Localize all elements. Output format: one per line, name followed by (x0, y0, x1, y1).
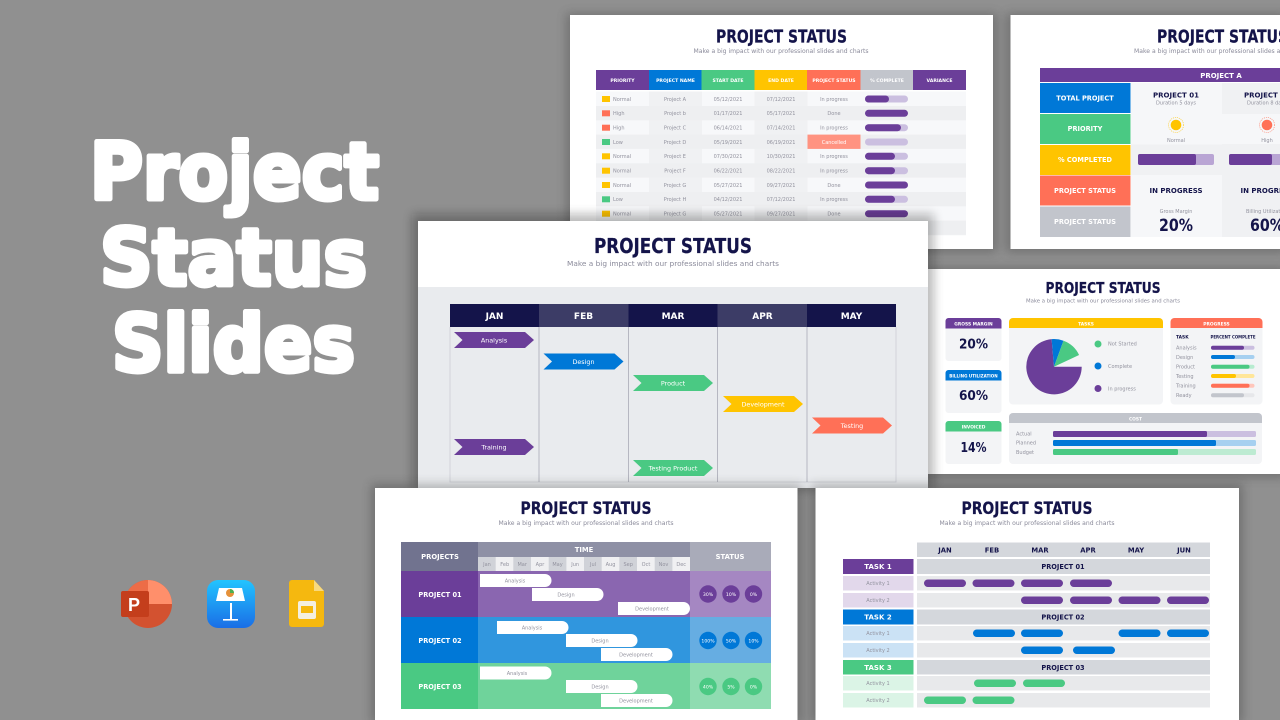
subtitle: dashboard slide: Make a big impact with our professional slides and charts (1026, 298, 1180, 304)
table rows: Project G (664, 212, 686, 218)
heading: gantt slide: PROJECT STATUS (962, 499, 1092, 519)
table rows: Normal (613, 183, 631, 189)
progress bars (865, 96, 908, 217)
card: gross margin: GROSS MARGIN (954, 322, 993, 328)
row: project 02: 50% (726, 638, 737, 644)
table rows: 05/17/2021 (767, 111, 795, 117)
table rows: Normal (613, 97, 631, 103)
group: task 1 (843, 559, 1210, 608)
panel: progress bars: PROGRESS (1203, 322, 1230, 328)
card: billing utilization (946, 370, 1002, 413)
table rows: Project C (664, 126, 687, 132)
panel: cost bars: Actual (1016, 432, 1032, 438)
subtitle: table slide: Make a big impact with our professional slides and charts (694, 48, 868, 55)
table rows: Normal (613, 168, 631, 174)
panel: tasks pie chart: TASKS (1078, 322, 1094, 328)
table rows: In progress (820, 168, 848, 174)
table rows: In progress (820, 126, 848, 132)
table rows: Normal (613, 212, 631, 218)
title: Slides (112, 300, 355, 390)
panel: progress bars: Training (1175, 384, 1196, 390)
panel: progress bars: Testing (1175, 374, 1194, 380)
row labels: PROJECT STATUS (1054, 187, 1116, 195)
table rows: 09/27/2021 (767, 212, 795, 218)
month header: MAR (1031, 546, 1049, 554)
panel: tasks pie chart (1009, 318, 1163, 404)
row: project 02: PROJECT 02 (418, 637, 462, 645)
month cells: Mar (517, 562, 528, 568)
heading: time slide: PROJECT STATUS (520, 499, 652, 519)
arrow: product: Product (661, 380, 686, 388)
row: project 03: Design (591, 684, 609, 690)
panel: task gantt slide (811, 484, 1243, 720)
table rows: Project A (664, 97, 687, 103)
panel: monthly arrows slide (412, 214, 934, 490)
row labels: TOTAL PROJECT (1056, 94, 1114, 102)
column: project 01: Duration 5 days (1156, 100, 1196, 106)
panel: progress bars (1170, 318, 1262, 404)
table rows: Done (827, 212, 841, 218)
table header: % COMPLETE (870, 78, 904, 84)
subtitle: arrows slide: Make a big impact with our professional slides and charts (567, 259, 779, 268)
panel: cost bars (1009, 413, 1262, 464)
group: task 3: TASK 3 (864, 664, 892, 672)
heading: dashboard slide: PROJECT STATUS (1046, 279, 1160, 297)
title: Status (100, 214, 367, 304)
table rows: Done (827, 183, 841, 189)
month header: FEB (574, 312, 593, 322)
project A header: PROJECT A (1200, 72, 1242, 80)
table header: END DATE (768, 78, 794, 84)
row labels: % COMPLETED (1058, 156, 1112, 164)
column: project 01 (1131, 83, 1222, 237)
month header: MAY (841, 312, 863, 322)
arrow: analysis (454, 332, 534, 348)
arrow: development (723, 396, 803, 412)
table rows: 06/19/2021 (767, 140, 795, 146)
table header (401, 542, 771, 571)
row: project 02: 10% (748, 638, 759, 644)
column: project 01: Normal (1167, 138, 1185, 144)
column: project 01: 20% (1159, 216, 1193, 235)
month header (450, 304, 896, 327)
table rows: Low (613, 197, 623, 203)
table rows: Project b (664, 111, 686, 117)
panel: progress bars: Analysis (1176, 346, 1197, 352)
arrow: product (633, 375, 713, 391)
column: project 01: Gross Margin (1160, 209, 1192, 215)
table header (596, 70, 966, 90)
arrow: testing product: Testing Product (648, 464, 698, 472)
row labels: PRIORITY (1068, 125, 1103, 133)
card: invoiced (946, 421, 1002, 464)
table rows: 10/30/2021 (767, 154, 795, 160)
column: project 01: IN PROGRESS (1149, 187, 1203, 195)
icon: Keynote (207, 580, 255, 628)
month header: FEB (985, 546, 999, 554)
table rows: In progress (820, 197, 848, 203)
month cells: Dec (676, 562, 686, 568)
table rows: Cancelled (822, 140, 846, 146)
heading: arrows slide: PROJECT STATUS (594, 234, 752, 258)
month cells (478, 557, 690, 571)
panel: progress bars: Product (1176, 364, 1195, 370)
row: project 01: Analysis (505, 578, 526, 584)
group: task 1: Activity 2 (866, 598, 890, 604)
card: invoiced: 14% (960, 440, 987, 456)
month header (917, 542, 1210, 557)
row: project 03: Analysis (507, 671, 528, 677)
row: project 01: Design (557, 592, 575, 598)
group: task 1: Activity 1 (866, 581, 890, 587)
table rows: Project E (664, 154, 686, 160)
card: billing utilization: 60% (959, 388, 988, 404)
panel: status table slide (566, 13, 997, 253)
month cells: Feb (500, 562, 509, 568)
table header: PROJECT STATUS (812, 78, 856, 84)
table header: START DATE (712, 78, 744, 84)
panel: projects time status slide (371, 484, 802, 720)
month header: JUN (1176, 546, 1191, 554)
row: project 02: Analysis (522, 626, 543, 632)
card: gross margin: 20% (959, 336, 988, 352)
row: project 02: 100% (701, 638, 715, 644)
row: project 03: 0% (750, 684, 758, 690)
panel: progress bars: TASK (1176, 334, 1189, 340)
month header: MAY (1128, 546, 1144, 554)
row: project 03: PROJECT 03 (418, 683, 462, 691)
group: task 3: Activity 1 (866, 681, 890, 687)
panel: progress bars: PERCENT COMPLETE (1210, 334, 1256, 340)
month cells: Sep (623, 562, 633, 568)
column: project 02 (1222, 83, 1280, 237)
card: billing utilization: BILLING UTILIZATION (949, 374, 998, 378)
month cells: May (552, 562, 563, 568)
table rows: Normal (613, 154, 631, 160)
month cells: Apr (536, 562, 545, 568)
table rows: 06/14/2021 (714, 126, 742, 132)
group: task 3: PROJECT 03 (1041, 664, 1085, 672)
group: task 1: PROJECT 01 (1041, 563, 1085, 571)
table rows: 05/19/2021 (714, 140, 742, 146)
group: task 2: PROJECT 02 (1041, 614, 1085, 622)
subtitle: time slide: Make a big impact with our professional slides and charts (498, 520, 674, 527)
table rows: 07/12/2021 (767, 97, 795, 103)
table rows: Project H (664, 197, 686, 203)
month header: JAN (937, 546, 952, 554)
table rows (596, 92, 966, 236)
row: project 01: 10% (726, 592, 737, 598)
month header: APR (1080, 546, 1096, 554)
table rows: High (613, 111, 624, 117)
table header: TIME (575, 546, 594, 554)
panel: cost bars: Planned (1016, 440, 1036, 446)
arrow: analysis: Analysis (481, 336, 508, 344)
column: project 01: PROJECT 01 (1153, 92, 1199, 100)
row: project 03 (401, 663, 771, 709)
arrow: design (544, 354, 624, 370)
row: project 01: 0% (750, 592, 758, 598)
table rows: 05/12/2021 (714, 97, 742, 103)
month header: MAR (662, 312, 684, 322)
panel: project A comparison slide (1006, 13, 1280, 253)
row: project 02: Development (619, 652, 653, 658)
card: invoiced: INVOICED (962, 424, 986, 430)
month header: APR (752, 312, 773, 322)
table rows: In progress (820, 154, 848, 160)
panel: progress bars: Ready (1176, 393, 1192, 399)
card: gross margin (946, 318, 1002, 361)
table rows: High (613, 126, 624, 132)
table rows: 07/14/2021 (767, 126, 795, 132)
month cells: Jun (570, 562, 579, 568)
month cells: Oct (642, 562, 650, 568)
arrow: development: Development (741, 400, 785, 408)
panel: tasks pie chart: Not Started (1108, 342, 1137, 348)
table rows: 06/22/2021 (714, 168, 742, 174)
group: task 3: Activity 2 (866, 698, 890, 704)
table rows: 08/22/2021 (767, 168, 795, 174)
project A header (1040, 68, 1280, 82)
table header: STATUS (716, 553, 744, 561)
table rows: 09/27/2021 (767, 183, 795, 189)
icon: PowerPoint (121, 580, 172, 628)
panel: dashboard slide (925, 267, 1280, 478)
title (90, 128, 379, 390)
table rows: 07/12/2021 (767, 197, 795, 203)
arrow: training: Training (480, 444, 507, 452)
panel: cost bars: Budget (1016, 450, 1034, 456)
column: project 02: High (1261, 138, 1273, 144)
table rows: 04/12/2021 (714, 197, 742, 203)
arrow: testing (812, 418, 892, 434)
table rows: 07/30/2021 (714, 154, 742, 160)
table rows: Low (613, 140, 623, 146)
icon: PowerPoint: P (128, 595, 140, 615)
table rows: In progress (820, 97, 848, 103)
row: project 01: PROJECT 01 (418, 591, 462, 599)
table header: PRIORITY (610, 78, 635, 84)
row: project 02: Design (591, 638, 609, 644)
row: project 03: 40% (703, 684, 714, 690)
row labels (1040, 83, 1130, 237)
heading: table slide: PROJECT STATUS (716, 28, 847, 48)
month header: JAN (485, 312, 503, 322)
panel: progress bars: Design (1176, 355, 1193, 361)
panel: tasks pie chart: Complete (1108, 364, 1132, 370)
arrow: testing: Testing (840, 422, 863, 430)
row: project 01: Development (635, 606, 669, 612)
month cells: Aug (606, 562, 615, 568)
panel: cost bars: COST (1129, 416, 1142, 422)
table rows: Done (827, 111, 841, 117)
timeline grid (450, 327, 896, 482)
table header: VARIANCE (927, 78, 952, 84)
subtitle: gantt slide: Make a big impact with our professional slides and charts (940, 520, 1114, 527)
arrow: design: Design (572, 358, 595, 366)
table rows: Project G (664, 183, 686, 189)
table rows: Project D (664, 140, 686, 146)
icon: Google Slides (289, 580, 324, 627)
panel: tasks pie chart: In progress (1108, 386, 1136, 392)
group: task 1: TASK 1 (864, 563, 892, 571)
group: task 2: TASK 2 (864, 614, 892, 622)
group: task 2: Activity 2 (866, 648, 890, 654)
table header: PROJECT NAME (656, 78, 695, 84)
title: Project (90, 128, 379, 218)
row: project 03: Development (619, 698, 653, 704)
arrow: testing product (633, 460, 713, 476)
row labels: PROJECT STATUS (1054, 218, 1116, 226)
group: task 2 (843, 610, 1210, 658)
month cells: Jan (482, 562, 491, 568)
row: project 01: 30% (703, 592, 714, 598)
row: project 02 (401, 617, 771, 663)
table rows: 05/27/2021 (714, 183, 742, 189)
month cells: Jul (589, 562, 596, 568)
table header: PROJECTS (421, 553, 459, 561)
table rows: 01/17/2021 (714, 111, 742, 117)
table rows: Project F (664, 168, 686, 174)
row: project 03: 5% (727, 684, 735, 690)
group: task 3 (843, 660, 1210, 708)
table rows: 05/27/2021 (714, 212, 742, 218)
arrow: training (454, 439, 534, 455)
row: project 01 (401, 571, 771, 617)
group: task 2: Activity 1 (866, 631, 890, 637)
month cells: Nov (659, 562, 668, 568)
